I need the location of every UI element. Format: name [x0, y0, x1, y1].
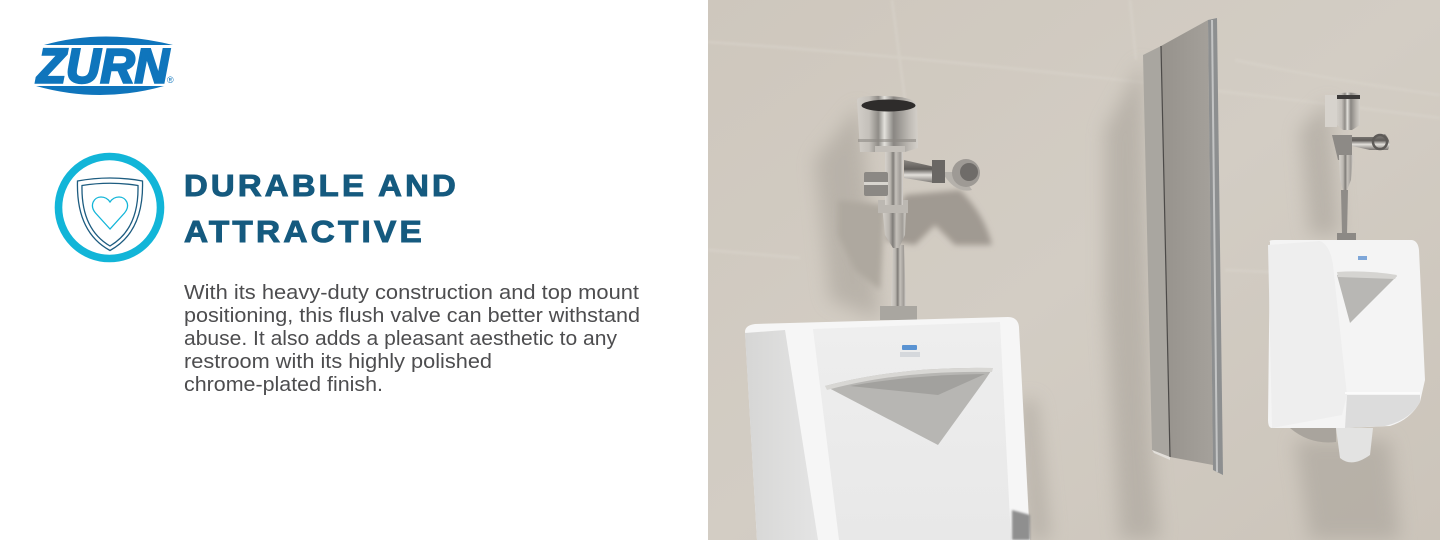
wall shadows	[815, 60, 1400, 540]
body text: abuse. It also adds a pleasant aesthetic to any	[184, 328, 617, 350]
small flush valve	[1325, 92, 1389, 240]
Zurn logo: ZURN	[35, 40, 170, 94]
wall	[708, 0, 1440, 540]
tile seams	[708, 0, 1440, 272]
large urinal	[745, 317, 1030, 540]
heading: DURABLE AND	[184, 168, 459, 203]
partition panel	[1143, 18, 1223, 475]
left white panel	[0, 0, 708, 540]
photo: restroom with urinals and flush valves	[708, 0, 1440, 540]
body text: chrome-plated finish.	[184, 374, 383, 396]
heading: ATTRACTIVE	[184, 214, 425, 249]
body text: With its heavy-duty construction and top mount	[184, 282, 639, 304]
body text: positioning, this flush valve can better withstand	[184, 305, 640, 327]
body text	[184, 282, 640, 396]
icon: shield with heart in ring	[58, 156, 160, 258]
valve shadow	[885, 190, 992, 245]
trap	[1336, 428, 1373, 462]
Zurn logo: ®	[167, 75, 174, 85]
heading	[184, 168, 459, 249]
small urinal	[1268, 240, 1425, 462]
large flush valve	[857, 96, 980, 320]
body text: restroom with its highly polished	[184, 351, 492, 373]
